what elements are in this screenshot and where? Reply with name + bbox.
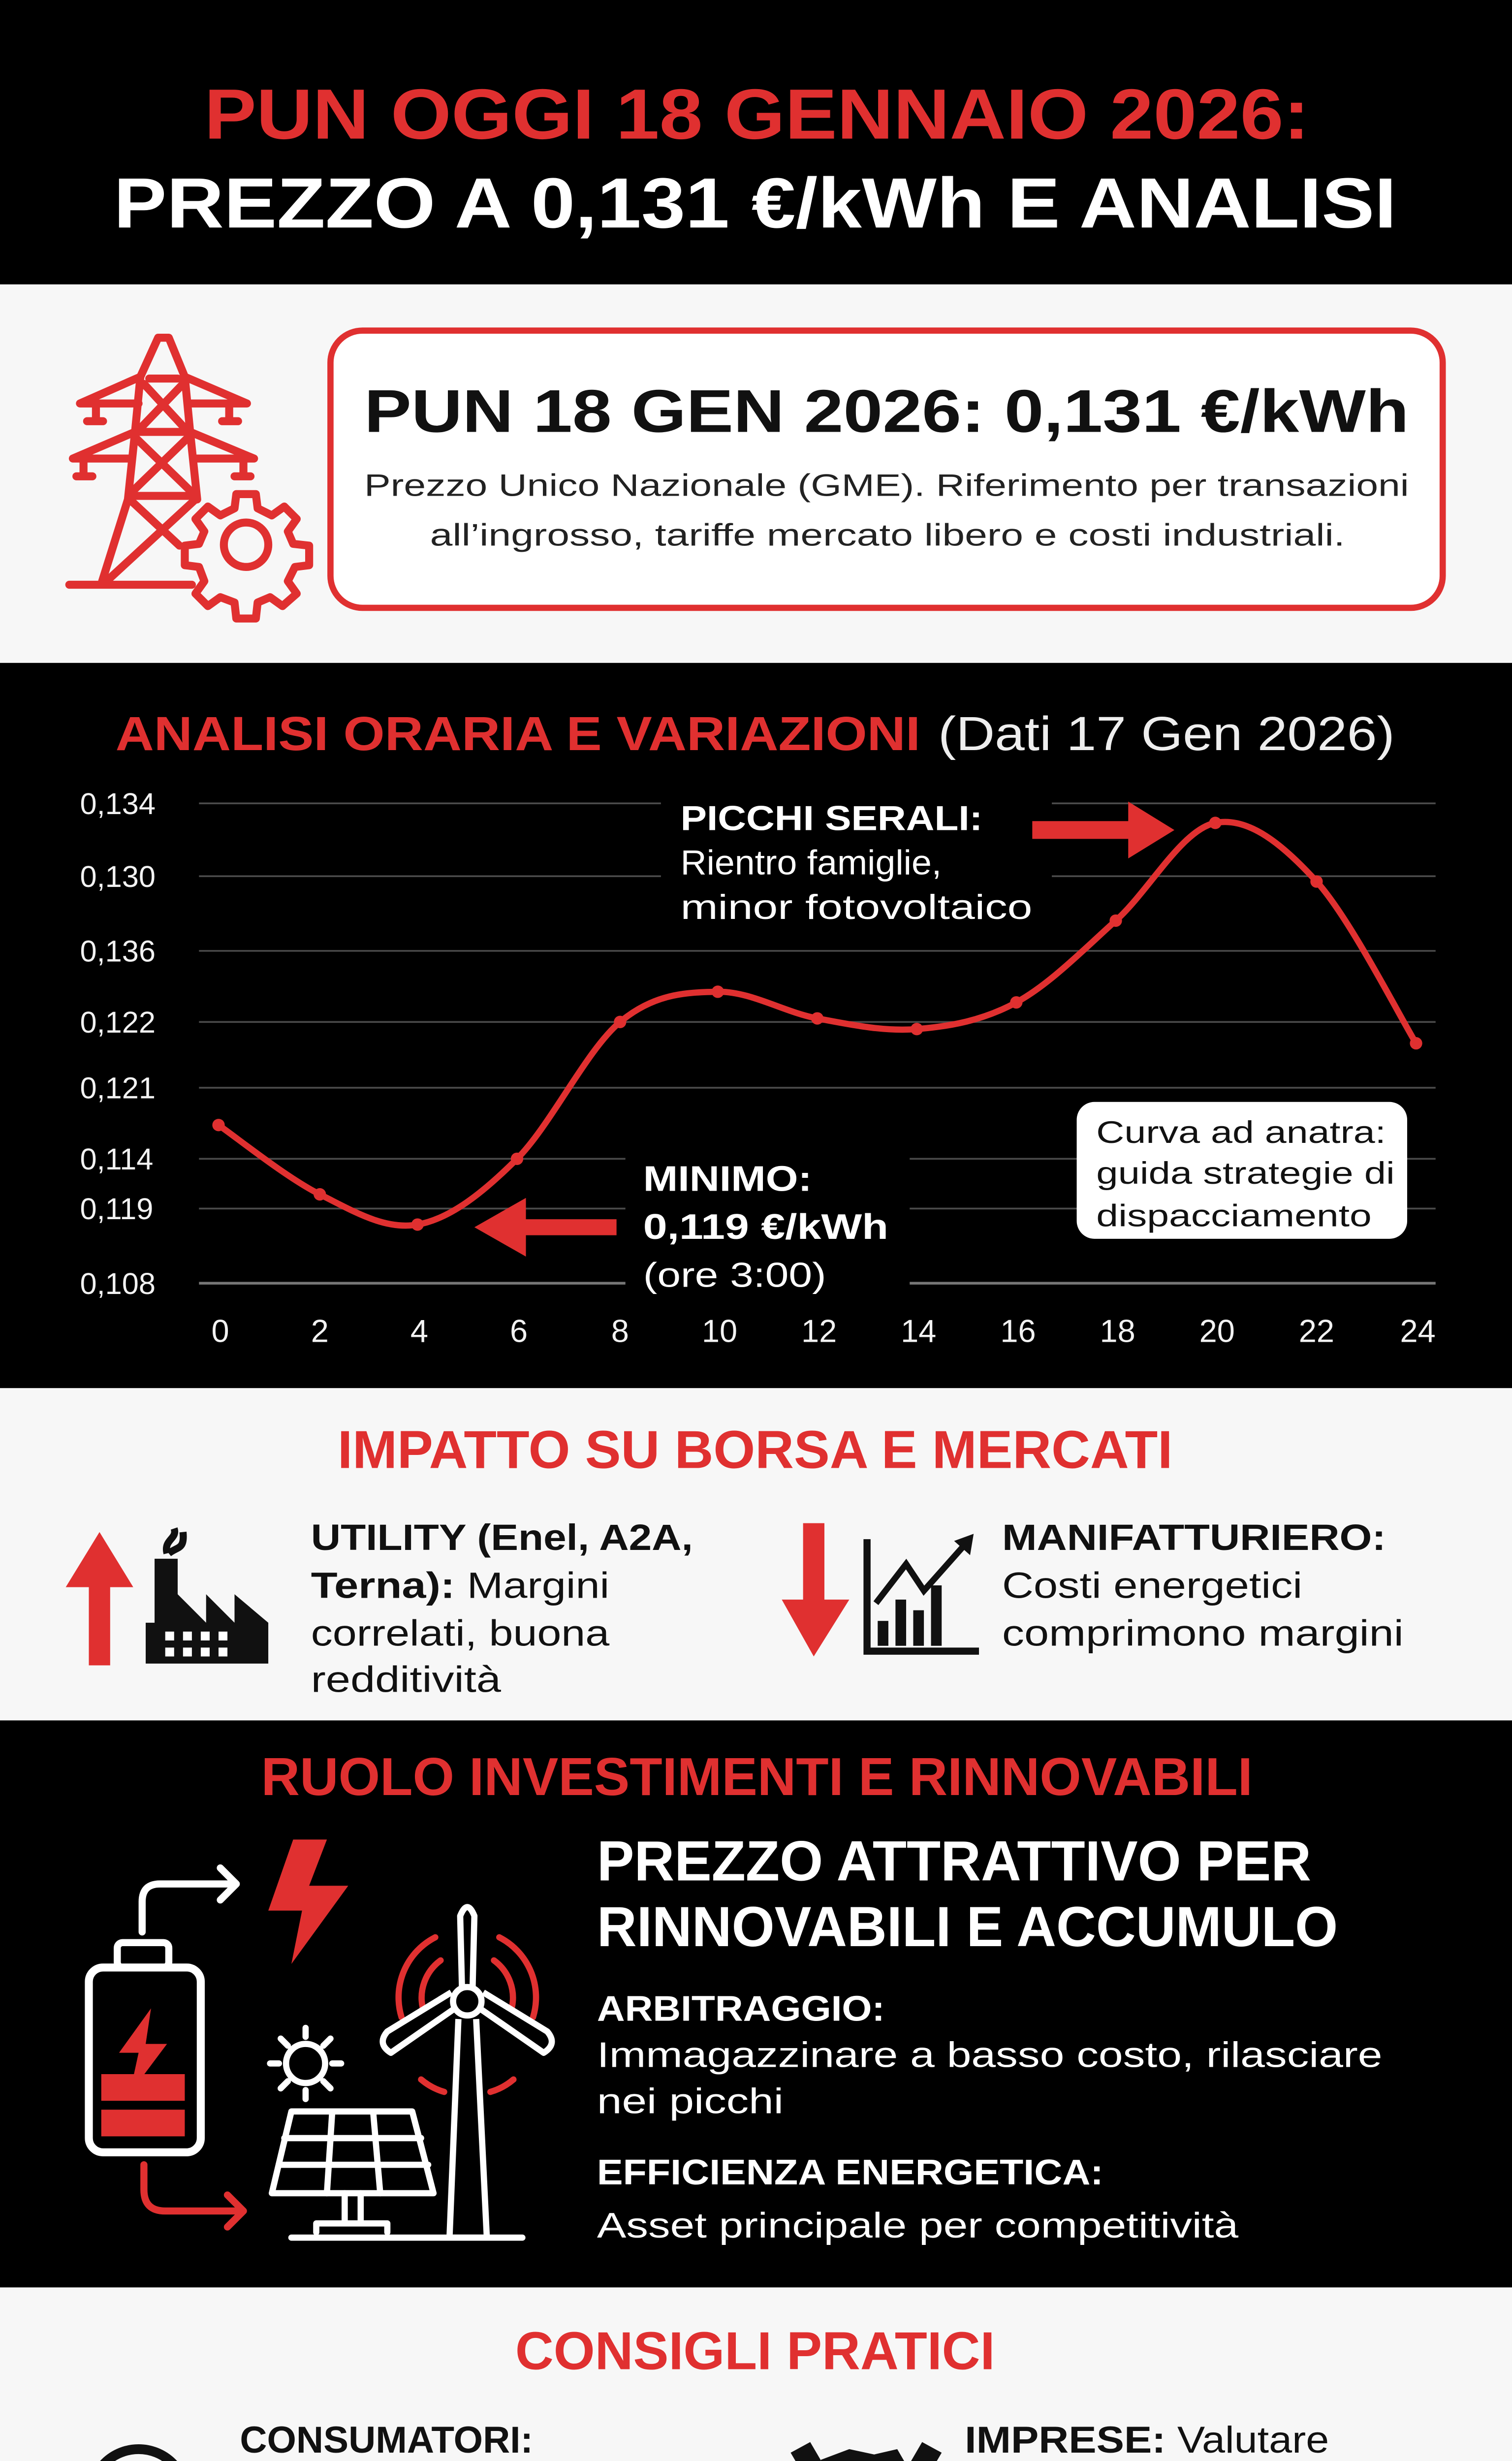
line chart: 6 <box>510 1313 528 1349</box>
line chart: 18 <box>1100 1313 1135 1349</box>
text: renewables: EFFICIENZA ENERGETICA: <box>597 2153 1103 2192</box>
line chart: 0,130 <box>80 860 156 894</box>
annotation: evening peaks <box>681 798 1032 926</box>
chart heading <box>116 707 1395 760</box>
annotation: minimum <box>643 1159 888 1294</box>
line chart: 4 <box>410 1313 428 1349</box>
arrow: renewables to battery <box>144 2165 244 2227</box>
summary box <box>330 331 1443 608</box>
line chart: 0,114 <box>80 1142 153 1176</box>
line chart: 0 <box>212 1313 229 1349</box>
annotation: minimum: 0,119 €/kWh <box>643 1207 888 1247</box>
text: renewables: nei picchi <box>597 2082 784 2121</box>
icon: solar panel <box>272 2112 522 2238</box>
text: manufacturing: MANIFATTURIERO: <box>1002 1517 1386 1558</box>
annotation: minimum: (ore 3:00) <box>643 1255 826 1294</box>
summary box: all’ingrosso, tariffe mercato libero e costi industriali. <box>430 518 1345 553</box>
text: utility: UTILITY (Enel, A2A, <box>311 1517 693 1558</box>
text: manufacturing: Costi energetici <box>1002 1565 1302 1606</box>
text: manufacturing <box>1002 1517 1404 1654</box>
callout: duck curve: dispacciamento <box>1096 1199 1372 1233</box>
line chart: 0,119 <box>80 1192 153 1226</box>
line chart: 24 <box>1400 1313 1436 1349</box>
line chart: 12 <box>801 1313 837 1349</box>
annotation: evening peaks: Rientro famiglie, <box>681 843 942 882</box>
heading: IMPATTO SU BORSA E MERCATI <box>338 1420 1173 1480</box>
header band <box>0 0 1512 284</box>
icon: pylon with gear <box>69 338 309 619</box>
title <box>114 74 1396 243</box>
text: renewables: Asset principale per competitività <box>597 2206 1239 2245</box>
line chart: 0,108 <box>80 1267 156 1301</box>
icon: factory <box>146 1528 268 1664</box>
summary box: PUN 18 GEN 2026: 0,131 €/kWh <box>364 378 1409 445</box>
panel: practical tips <box>0 2287 1512 2461</box>
line chart: 14 <box>901 1313 936 1349</box>
icon: chart up <box>867 1534 979 1651</box>
title: PUN OGGI 18 GENNAIO 2026: <box>204 74 1309 154</box>
icon: clock <box>91 2449 187 2461</box>
text: renewables: Immagazzinare a basso costo, rilasciare <box>597 2036 1382 2075</box>
text: utility: redditività <box>311 1659 502 1700</box>
callout: duck curve: guida strategie di <box>1096 1156 1395 1191</box>
text: manufacturing: comprimono margini <box>1002 1613 1404 1654</box>
line chart: 8 <box>611 1313 629 1349</box>
annotation: evening peaks: minor fotovoltaico <box>681 887 1032 926</box>
arrow: to minimum <box>474 1198 617 1257</box>
icon: handshake <box>790 2442 942 2461</box>
line chart: 20 <box>1199 1313 1235 1349</box>
line chart: 2 <box>311 1313 329 1349</box>
line chart: 0,121 <box>80 1072 156 1105</box>
icon: up arrow <box>66 1532 133 1665</box>
text: utility: correlati, buona <box>311 1613 610 1654</box>
panel: hourly chart <box>0 663 1512 1388</box>
heading: CONSIGLI PRATICI <box>515 2321 995 2380</box>
arrow: to peak <box>1032 802 1174 858</box>
icon: wind turbine <box>383 1907 552 2238</box>
panel: market impact <box>0 1388 1512 1720</box>
callout: duck curve: Curva ad anatra: <box>1096 1115 1386 1150</box>
annotation: minimum: MINIMO: <box>643 1159 812 1199</box>
chart heading: (Dati 17 Gen 2026) <box>938 707 1395 760</box>
line chart: 0,136 <box>80 935 156 969</box>
chart heading: ANALISI ORARIA E VARIAZIONI <box>116 707 920 760</box>
line chart: 0,134 <box>80 787 156 821</box>
text: businesses: IMPRESE: Valutare <box>965 2419 1329 2461</box>
line chart <box>80 787 1436 1349</box>
arrow: battery to grid <box>142 1868 236 1932</box>
heading: RUOLO INVESTIMENTI E RINNOVABILI <box>261 1747 1253 1806</box>
icon: sun <box>270 2028 341 2099</box>
text: renewables: RINNOVABILI E ACCUMULO <box>597 1895 1338 1958</box>
text: renewables: ARBITRAGGIO: <box>597 1989 885 2029</box>
text: renewables: PREZZO ATTRATTIVO PER <box>597 1829 1311 1893</box>
text: renewables <box>597 1829 1382 2245</box>
icon: battery <box>89 1943 201 2152</box>
line chart: 16 <box>1000 1313 1036 1349</box>
text: utility: Terna): Margini <box>311 1565 609 1606</box>
callout: duck curve <box>1077 1102 1407 1239</box>
line chart: 10 <box>702 1313 737 1349</box>
annotation: evening peaks: PICCHI SERALI: <box>681 798 982 837</box>
icon: lightning <box>268 1839 348 1964</box>
title: PREZZO A 0,131 €/kWh E ANALISI <box>114 163 1396 243</box>
line chart: 0,122 <box>80 1006 156 1040</box>
line chart: 22 <box>1299 1313 1334 1349</box>
panel: PUN summary <box>0 284 1512 663</box>
text: consumers: CONSUMATORI: <box>240 2419 533 2461</box>
panel: investments and renewables <box>0 1720 1512 2287</box>
text: utility <box>311 1517 693 1700</box>
icon: down arrow <box>782 1523 850 1656</box>
summary box: Prezzo Unico Nazionale (GME). Riferimento per transazioni <box>364 468 1409 503</box>
